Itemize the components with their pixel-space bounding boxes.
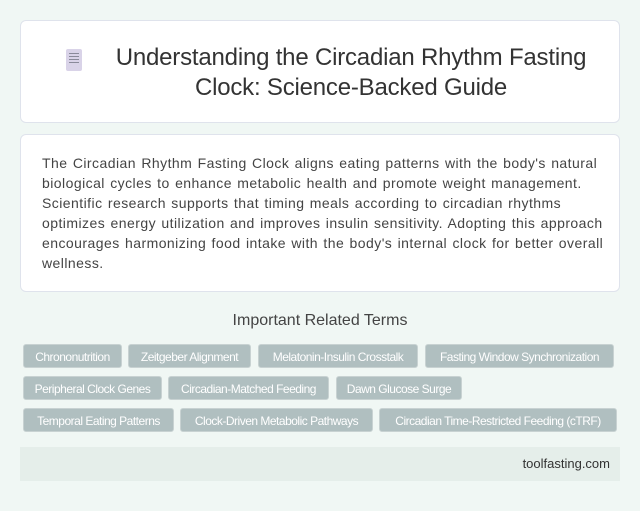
tags: Dawn Glucose Surge — [347, 382, 451, 396]
description text: Scientific research supports that timing meals according to circadian rhythms — [42, 195, 561, 211]
description text: optimizes energy utilization and improves insulin sensitivity. Adopting this approach — [42, 215, 603, 231]
tags: Circadian Time-Restricted Feeding (cTRF) — [395, 414, 601, 428]
title card — [20, 20, 620, 123]
description text — [42, 155, 603, 271]
tags: Melatonin-Insulin Crosstalk — [273, 350, 403, 364]
icon: document — [66, 49, 82, 71]
footer text: toolfasting.com — [523, 456, 610, 471]
tags: Chrononutrition — [35, 350, 110, 364]
description card — [20, 134, 620, 292]
tags: Fasting Window Synchronization — [440, 350, 599, 364]
title: Understanding the Circadian Rhythm Fasting Clock: Science-Backed Guide — [116, 44, 586, 101]
tags: Peripheral Clock Genes — [35, 382, 150, 396]
description text: biological cycles to enhance metabolic health and promote weight management. — [42, 175, 582, 191]
tags: Clock-Driven Metabolic Pathways — [195, 414, 358, 428]
tags: Circadian-Matched Feeding — [181, 382, 316, 396]
description text: wellness. — [42, 255, 104, 271]
heading: related terms: Important Related Terms — [233, 312, 407, 329]
tags: Zeitgeber Alignment — [141, 350, 238, 364]
description text: encourages harmonizing food intake with the body's internal clock for better overall — [42, 235, 603, 251]
description text: The Circadian Rhythm Fasting Clock aligns eating patterns with the body's natural — [42, 155, 597, 171]
tags: Temporal Eating Patterns — [37, 414, 160, 428]
footer — [20, 447, 620, 481]
